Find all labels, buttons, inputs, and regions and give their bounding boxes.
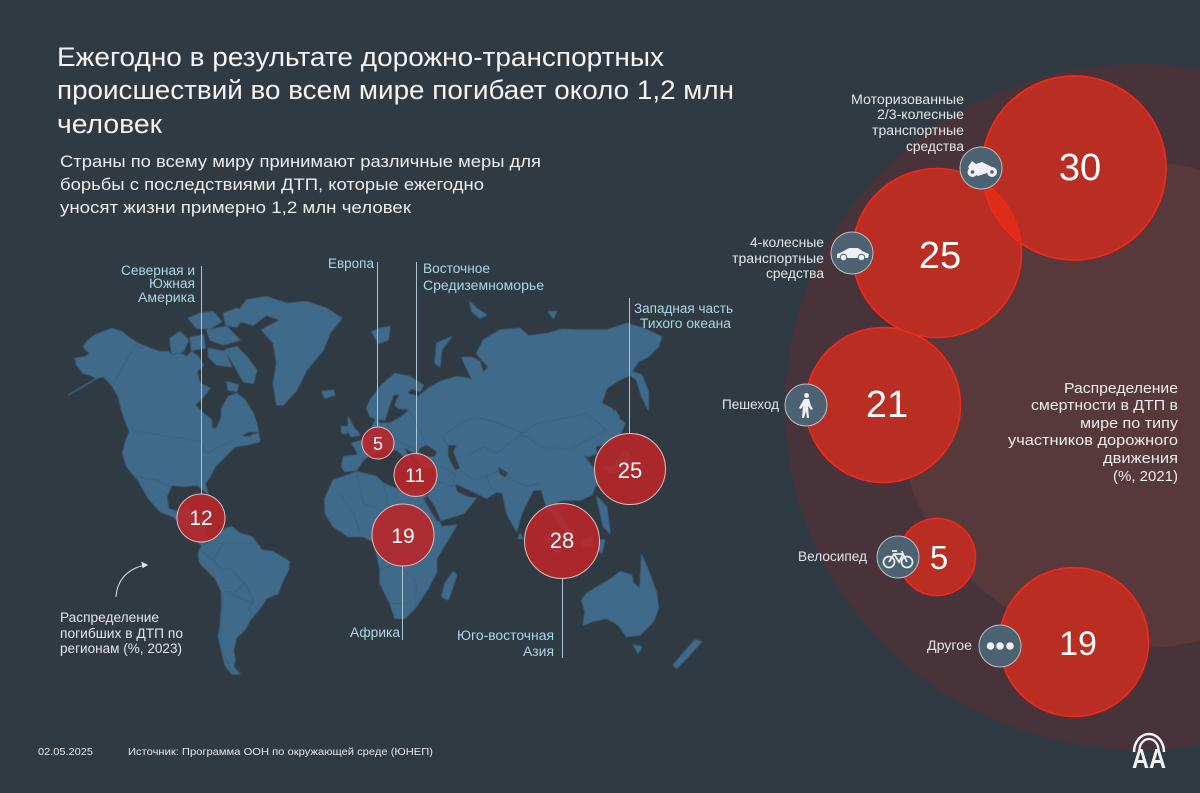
map legend text	[60, 610, 183, 656]
region bubble: Eastern Mediterranean 11	[394, 454, 437, 496]
label: 4-wheeled vehicles	[732, 235, 824, 281]
region label: South-East Asia: Юго-восточная	[457, 628, 554, 643]
label: motorized vehicles: 2/3-колесные	[877, 107, 964, 122]
region bubble: Africa 19: 19	[391, 525, 415, 548]
right chart caption	[1008, 380, 1179, 485]
region bubble: South-East Asia 28	[524, 504, 600, 578]
region label: Americas: Южная	[149, 276, 195, 291]
bubble: 4-wheeled vehicles 25	[852, 168, 1022, 338]
region label: Americas: Северная и	[121, 263, 195, 278]
right chart caption: Распределение	[1064, 380, 1178, 397]
map: Americas north and Greenland	[68, 297, 342, 548]
footer date: 02.05.2025	[38, 746, 93, 758]
label: 4-wheeled vehicles: 4-колесные	[750, 235, 824, 250]
region label: South-East Asia: Азия	[523, 644, 554, 659]
region label: Western Pacific: Западная часть	[634, 301, 733, 316]
region bubble: Eastern Mediterranean 11: 11	[405, 466, 425, 487]
icon: other	[979, 625, 1021, 667]
title: Ежегодно в результате дорожно-транспортных	[57, 42, 665, 72]
map legend text: регионам (%, 2023)	[60, 641, 182, 656]
region label: Western Pacific: Тихого океана	[640, 316, 732, 331]
label: motorized vehicles: средства	[906, 139, 964, 154]
region bubble: Western Pacific 25	[594, 434, 666, 504]
subtitle	[60, 152, 541, 217]
region bubble: Western Pacific 25: 25	[618, 458, 642, 483]
bubble: pedestrian 21: 21	[866, 384, 908, 426]
region label: Americas: Америка	[138, 290, 196, 305]
map: South America	[198, 527, 289, 674]
label: pedestrian: Пешеход	[722, 397, 779, 412]
right chart caption: участников дорожного	[1008, 432, 1178, 449]
icon: car	[831, 232, 873, 274]
label: cyclist: Велосипед	[798, 549, 867, 564]
region label: Western Pacific	[634, 301, 733, 331]
region label: Eastern Mediterranean	[423, 261, 544, 293]
subtitle: Страны по всему миру принимают различные меры для	[60, 152, 541, 171]
region label: Eastern Mediterranean: Средиземноморье	[423, 278, 544, 293]
label: other: Другое	[927, 638, 972, 653]
right chart caption: мире по типу	[1080, 415, 1179, 432]
right chart caption: движения	[1103, 450, 1178, 467]
region bubble: Africa 19	[372, 504, 434, 566]
title: человек	[57, 109, 162, 139]
map legend text: Распределение	[60, 610, 159, 625]
region label: Eastern Mediterranean: Восточное	[423, 261, 490, 276]
icon: motorcycle	[960, 147, 1002, 189]
label: 4-wheeled vehicles: средства	[766, 266, 824, 281]
world map	[68, 297, 702, 674]
bubble: motorized 2/3-wheelers 30	[982, 76, 1166, 260]
icon: pedestrian	[785, 384, 827, 426]
logo: AA: AA	[1132, 743, 1166, 774]
label: motorized vehicles	[851, 92, 964, 154]
label: motorized vehicles: Моторизованные	[851, 92, 964, 107]
title: происшествий во всем мире погибает около 1,2 млн	[57, 75, 734, 105]
region bubble: Europe 5	[362, 427, 394, 459]
bubble: motorized 2/3-wheelers 30: 30	[1059, 147, 1101, 189]
region bubble: South-East Asia 28: 28	[550, 528, 574, 553]
region label: Americas	[121, 263, 196, 305]
bubble: other 19: 19	[1059, 625, 1097, 663]
region label: South-East Asia	[457, 628, 554, 659]
footer source: Источник: Программа ООН по окружающей среде (ЮНЕП)	[128, 746, 433, 758]
region bubble: Americas 12	[177, 494, 225, 542]
region bubble: Europe 5: 5	[373, 434, 383, 454]
region label: Africa: Африка	[350, 625, 400, 640]
region bubble: Americas 12: 12	[189, 507, 213, 530]
arrow: to map	[116, 562, 147, 597]
label: motorized vehicles: транспортные	[872, 123, 964, 138]
map legend text: погибших в ДТП по	[60, 626, 183, 641]
bubble: cyclist 5: 5	[930, 539, 948, 576]
bubble: cyclist 5	[898, 518, 976, 596]
subtitle: борьбы с последствиями ДТП, которые ежегодно	[60, 175, 484, 194]
map: Eurasia, Africa and Oceania	[325, 302, 702, 668]
bubble: other 19	[1000, 568, 1148, 716]
bubble: pedestrian 21	[806, 328, 960, 482]
map leader lines	[202, 262, 630, 658]
subtitle: уносят жизни примерно 1,2 млн человек	[60, 198, 412, 217]
logo: AA	[1132, 734, 1166, 774]
right chart caption: (%, 2021)	[1113, 468, 1178, 485]
label: 4-wheeled vehicles: транспортные	[732, 251, 824, 266]
icon: bicycle	[877, 536, 919, 578]
right chart caption: смертности в ДТП в	[1031, 397, 1178, 414]
region label: Europe: Европа	[328, 256, 374, 271]
bubble overlap lens	[984, 75, 1167, 261]
title	[57, 42, 734, 139]
bubble: 4-wheeled vehicles 25: 25	[919, 235, 961, 277]
